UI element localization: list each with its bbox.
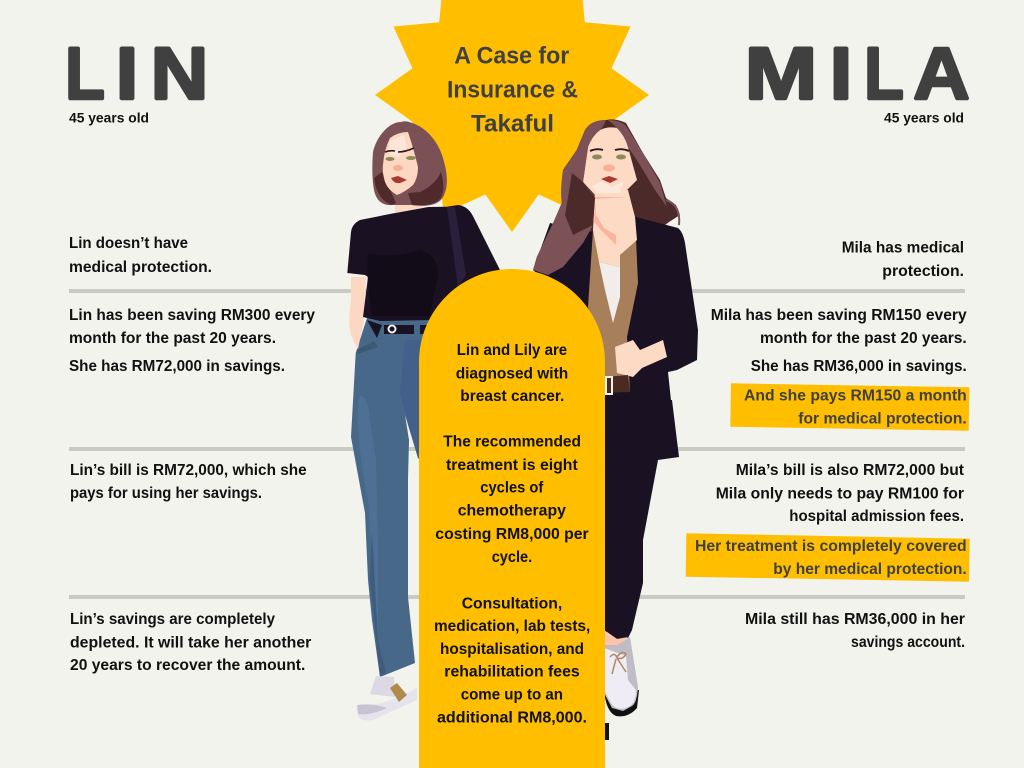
- arch text: treatment: costing RM8,000 per: [435, 526, 589, 543]
- Lin: protection: [69, 235, 212, 276]
- starburst title background: [375, 0, 649, 232]
- Lin: outcome: Lin’s savings are completely: [70, 611, 275, 628]
- Lin: savings: Lin has been saving RM300 every: [69, 307, 315, 324]
- arch text: diagnosis: [456, 342, 568, 405]
- title: [447, 42, 578, 138]
- arch text: treatment: cycle.: [492, 549, 532, 566]
- Mila white tee: [599, 262, 620, 323]
- arch text: additional fees: Consultation,: [462, 595, 562, 612]
- Lin neck: [395, 190, 428, 213]
- heading: LIN: I: [116, 32, 138, 115]
- Lin: bill: pays for using her savings.: [70, 485, 262, 502]
- heading: LIN: L: [65, 32, 105, 115]
- subheading: Mila age: 45 years old: [884, 110, 964, 126]
- arch text: treatment: chemotherapy: [458, 503, 566, 520]
- Lin: protection: Lin doesn’t have: [69, 235, 188, 252]
- Lin: savings: month for the past 20 years.: [69, 330, 276, 347]
- Lin: outcome: [70, 611, 311, 674]
- Mila trousers: [590, 400, 679, 639]
- Lin: bill: Lin’s bill is RM72,000, which she: [70, 462, 307, 479]
- heading: MILA: A: [913, 32, 970, 115]
- Lin: outcome: 20 years to recover the amount.: [70, 657, 305, 674]
- highlight: Mila monthly payment: for medical protection.: [798, 410, 967, 427]
- Mila shirt: [588, 217, 638, 392]
- Mila: protection: protection.: [882, 263, 964, 280]
- highlight: Mila monthly payment: [730, 383, 969, 431]
- Mila: outcome: Mila still has RM36,000 in her: [745, 611, 965, 628]
- Mila jacket: [533, 217, 698, 410]
- title: A Case for: [454, 42, 569, 69]
- heading: MILA: M: [744, 32, 818, 115]
- Lin t-shirt: [347, 205, 500, 321]
- Lin hair: [372, 121, 447, 206]
- Mila hand: [615, 340, 667, 377]
- Lin: protection: medical protection.: [69, 259, 212, 276]
- highlight: Mila treatment covered: [686, 533, 970, 582]
- highlight: Mila monthly payment: And she pays RM150 a month: [744, 388, 967, 405]
- Mila: savings: She has RM36,000 in savings.: [751, 358, 967, 375]
- Lin: savings: [69, 307, 315, 375]
- arch text: treatment: The recommended: [443, 434, 581, 451]
- Mila: savings: [711, 307, 967, 375]
- arch text: additional fees: [434, 595, 590, 727]
- Mila hair front: [533, 120, 679, 275]
- arch text: treatment: [435, 434, 589, 566]
- Lin jeans: [351, 316, 432, 677]
- Mila: bill: Mila only needs to pay RM100 for: [716, 485, 964, 502]
- title: Insurance &: [447, 77, 578, 104]
- heading: MILA: I: [830, 32, 852, 115]
- Lin: savings: She has RM72,000 in savings.: [69, 358, 285, 375]
- arch text: additional fees: additional RM8,000.: [437, 710, 587, 727]
- heading: LIN: N: [150, 32, 208, 115]
- arch text: additional fees: rehabilitation fees: [444, 664, 580, 681]
- highlight: Mila treatment covered: by her medical protection.: [773, 561, 967, 578]
- arch text: treatment: cycles of: [480, 480, 544, 497]
- title: Takaful: [471, 111, 554, 138]
- Mila belt: [605, 375, 630, 394]
- Mila: bill: Mila’s bill is also RM72,000 but: [736, 462, 965, 479]
- central arch panel: [419, 269, 605, 768]
- heading: MILA: L: [864, 32, 904, 115]
- Mila shoe: [604, 630, 639, 740]
- arch text: additional fees: medication, lab tests,: [434, 618, 590, 635]
- Mila: outcome: savings account.: [851, 634, 965, 651]
- arch text: additional fees: hospitalisation, and: [440, 641, 584, 658]
- arch text: diagnosis: Lin and Lily are: [457, 342, 567, 359]
- Mila: bill: [716, 462, 965, 525]
- Mila: savings: month for the past 20 years.: [760, 330, 967, 347]
- Mila: savings: Mila has been saving RM150 every: [711, 307, 967, 324]
- Mila neck: [593, 190, 637, 267]
- figure: Lin: [347, 121, 500, 720]
- Lin: outcome: depleted. It will take her another: [70, 634, 311, 651]
- Lin: bill: [70, 462, 307, 502]
- figure: Mila: [533, 119, 698, 740]
- Lin belt: [367, 320, 432, 338]
- arch text: additional fees: come up to an: [461, 686, 563, 703]
- Mila: bill: hospital admission fees.: [789, 508, 964, 525]
- Lin shoe: [357, 676, 417, 720]
- arch text: diagnosis: breast cancer.: [460, 388, 564, 405]
- Lin arm: [349, 277, 366, 349]
- subheading: Lin age: 45 years old: [69, 110, 149, 126]
- Mila hair back: [562, 119, 680, 235]
- Mila: protection: [842, 240, 964, 280]
- Lin face: [383, 132, 418, 195]
- highlight: Mila treatment covered: Her treatment is completely covered: [695, 538, 967, 555]
- arch text: treatment: treatment is eight: [446, 457, 578, 474]
- Mila face: [583, 127, 637, 195]
- Mila: protection: Mila has medical: [842, 240, 964, 257]
- arch text: diagnosis: diagnosed with: [456, 365, 568, 382]
- Mila: outcome: [745, 611, 965, 651]
